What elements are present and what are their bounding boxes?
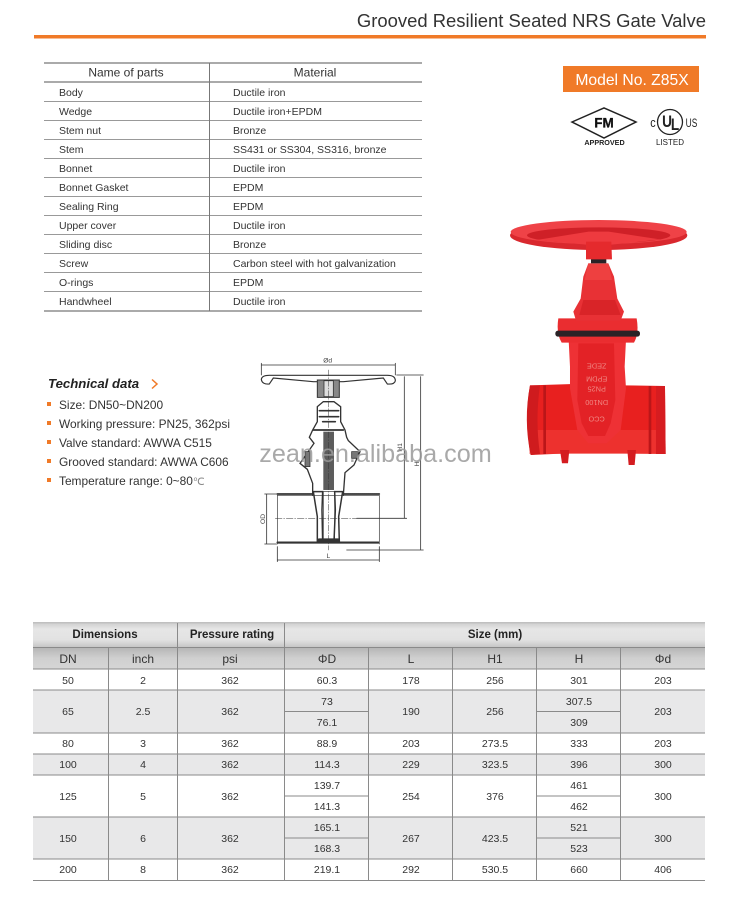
- panel: parts and materials table: EPDM: [233, 277, 263, 289]
- table data: 219.1: [314, 864, 340, 876]
- stem thread: [323, 432, 334, 490]
- table data: 462: [570, 801, 588, 813]
- table data: [59, 675, 672, 876]
- column headings: psi: [222, 652, 238, 666]
- technical data bullets: Valve standard: AWWA C515: [59, 436, 212, 450]
- technical drawing of valve: H1: [397, 443, 404, 452]
- panel: parts and materials table: Carbon steel with hot galvanization: [233, 258, 396, 270]
- table data: 125: [59, 791, 77, 803]
- table data: 150: [59, 833, 77, 845]
- table data: 376: [486, 791, 504, 803]
- table data: 521: [570, 822, 588, 834]
- panel: parts and materials table: [44, 63, 422, 311]
- panel: parts and materials table: Upper cover: [59, 220, 117, 232]
- table data: 362: [221, 864, 239, 876]
- panel: parts and materials table: O-rings: [59, 277, 93, 289]
- table data: 406: [654, 864, 672, 876]
- table data: 88.9: [317, 738, 337, 750]
- table headings: Dimensions: [72, 629, 138, 641]
- table data: 203: [402, 738, 420, 750]
- casting text: DN100: [585, 398, 608, 407]
- model number badge: Model No. Z85X: [575, 72, 689, 89]
- technical data bullets: Size: DN50~DN200: [59, 398, 163, 412]
- casting text: EPDM: [586, 375, 607, 384]
- technical data bullets: Grooved standard: AWWA C606: [59, 455, 229, 469]
- table headings: Pressure rating: [190, 629, 274, 641]
- table data: 178: [402, 675, 420, 687]
- icon: cULus listed: LISTED: [656, 138, 684, 147]
- table data: 300: [654, 791, 672, 803]
- technical data bullets: [47, 398, 230, 488]
- icon: cULus listed: US: [686, 118, 698, 130]
- technical drawing of valve: OD: [260, 514, 267, 524]
- table data: 323.5: [482, 759, 508, 771]
- column headings: [59, 652, 671, 666]
- panel: parts and materials table: Wedge: [59, 106, 92, 118]
- panel: parts and materials table: Sealing Ring: [59, 201, 119, 213]
- table data: 141.3: [314, 801, 340, 813]
- table data: 362: [221, 759, 239, 771]
- neck shoulders: [569, 340, 626, 443]
- table data: 80: [62, 738, 74, 750]
- icon: FM approved: FM: [594, 116, 614, 130]
- casting text: CCO: [588, 415, 605, 424]
- handwheel: [510, 221, 687, 250]
- table data: 273.5: [482, 738, 508, 750]
- column headings: Φd: [655, 652, 671, 666]
- table data: 660: [570, 864, 588, 876]
- casting text: [585, 361, 608, 424]
- table data: 256: [486, 706, 504, 718]
- icon: cULus listed: c: [650, 115, 656, 130]
- table data: 3: [140, 738, 146, 750]
- bonnet top: [573, 263, 624, 321]
- table data: 73: [321, 696, 333, 708]
- flange: [558, 318, 638, 343]
- watermark: zean.en.alibaba.com: [259, 440, 492, 468]
- panel: parts and materials table: Stem nut: [59, 125, 101, 137]
- panel: parts and materials table: Bonnet Gasket: [59, 182, 129, 194]
- panel: parts and materials table: Stem: [59, 144, 84, 156]
- panel: dimensions table: [33, 622, 705, 880]
- column headings: inch: [132, 652, 154, 666]
- grid lines: [33, 623, 705, 880]
- technical data bullets: Working pressure: PN25, 362psi: [59, 417, 230, 431]
- icon: cULus listed: U: [662, 113, 672, 131]
- table data: 100: [59, 759, 77, 771]
- table header shading: [33, 623, 705, 647]
- table data: 200: [59, 864, 77, 876]
- table data: 8: [140, 864, 146, 876]
- table data: 76.1: [317, 717, 337, 729]
- title: Grooved Resilient Seated NRS Gate Valve: [357, 10, 706, 31]
- table data: 307.5: [566, 696, 592, 708]
- model number badge: [563, 66, 699, 92]
- table data: 292: [402, 864, 420, 876]
- table data: 50: [62, 675, 74, 687]
- panel: parts and materials table: Handwheel: [59, 296, 112, 308]
- table data: 60.3: [317, 675, 337, 687]
- table headings: [72, 629, 522, 641]
- centre rib: [577, 343, 615, 436]
- table data: 300: [654, 759, 672, 771]
- table data: 267: [402, 833, 420, 845]
- table data: 362: [221, 675, 239, 687]
- technical drawing of valve: H: [414, 461, 421, 466]
- table data: 5: [140, 791, 146, 803]
- table data: 2: [140, 675, 146, 687]
- panel: parts and materials table: Name of parts: [88, 66, 164, 80]
- table data: 423.5: [482, 833, 508, 845]
- icon: FM approved: APPROVED: [584, 138, 625, 147]
- panel: technical data: [47, 376, 230, 488]
- table data: 523: [570, 843, 588, 855]
- table data: 203: [654, 706, 672, 718]
- panel: parts and materials table: Material: [294, 66, 336, 80]
- casting text: PN25: [587, 385, 606, 394]
- stem: [591, 259, 606, 263]
- panel: parts and materials table: Bonnet: [59, 163, 92, 175]
- column headings: ΦD: [318, 652, 336, 666]
- body pipe: [527, 384, 666, 455]
- column headings: H: [575, 652, 583, 666]
- technical drawing of valve: Ød: [323, 358, 332, 365]
- table data: 530.5: [482, 864, 508, 876]
- table data: 6: [140, 833, 146, 845]
- bonnet top: [300, 402, 360, 495]
- table data: 65: [62, 706, 74, 718]
- icon: cULus listed: L: [671, 116, 679, 134]
- table data: 256: [486, 675, 504, 687]
- panel: parts and materials table: EPDM: [233, 182, 263, 194]
- table data: 190: [402, 706, 420, 718]
- table data: 229: [402, 759, 420, 771]
- table data: 203: [654, 675, 672, 687]
- column headings: DN: [59, 652, 77, 666]
- table data: 4: [140, 759, 146, 771]
- panel: parts and materials table: Screw: [59, 258, 89, 270]
- icon: FM approved: [572, 108, 636, 147]
- table data: 114.3: [314, 759, 340, 771]
- technical drawing of valve: [260, 358, 423, 562]
- table data: 203: [654, 738, 672, 750]
- panel: parts and materials table: Body: [59, 87, 84, 99]
- table data: 362: [221, 833, 239, 845]
- wheel: [261, 375, 395, 384]
- table data: 333: [570, 738, 588, 750]
- technical drawing of valve: L: [326, 553, 330, 560]
- table data: 254: [402, 791, 420, 803]
- title underline: [34, 35, 706, 38]
- table headings: Size (mm): [468, 629, 522, 641]
- panel: parts and materials table: Ductile iron: [233, 87, 286, 99]
- wedge: [313, 492, 343, 542]
- panel: parts and materials table: Bronze: [233, 125, 266, 137]
- table data: 309: [570, 717, 588, 729]
- table data: 165.1: [314, 822, 340, 834]
- table data: 2.5: [136, 706, 150, 718]
- panel: parts and materials table: EPDM: [233, 201, 263, 213]
- panel: parts and materials table: Ductile iron+EPDM: [233, 106, 322, 118]
- panel: parts and materials table: Ductile iron: [233, 163, 286, 175]
- panel: parts and materials table: Bronze: [233, 239, 266, 251]
- heading: technical data: Technical data: [48, 376, 139, 391]
- pipe: [277, 495, 379, 544]
- panel: parts and materials table: SS431 or SS304, SS316, bronze: [233, 144, 387, 156]
- table data: 300: [654, 833, 672, 845]
- table data: 461: [570, 780, 588, 792]
- panel: parts and materials table: Ductile iron: [233, 296, 286, 308]
- column headings: H1: [487, 652, 503, 666]
- hub: [317, 380, 339, 397]
- table data: 362: [221, 791, 239, 803]
- technical data bullets: Temperature range: 0~80℃: [59, 474, 205, 488]
- table data: 362: [221, 706, 239, 718]
- icon: chevron: [152, 380, 157, 388]
- column headings: L: [408, 652, 415, 666]
- icon: cULus listed: [650, 110, 698, 147]
- table data: 139.7: [314, 780, 340, 792]
- table data: 301: [570, 675, 588, 687]
- panel: parts and materials table: Sliding disc: [59, 239, 112, 251]
- casting text: ZEDE: [587, 361, 606, 370]
- panel: parts and materials table: Ductile iron: [233, 220, 286, 232]
- table data: 168.3: [314, 843, 340, 855]
- table data: 362: [221, 738, 239, 750]
- table data: 396: [570, 759, 588, 771]
- shaded rows: [33, 690, 705, 859]
- hub: [586, 242, 612, 259]
- product photo: red gate valve: [510, 220, 687, 465]
- feet: [560, 450, 636, 465]
- dims: [261, 363, 423, 562]
